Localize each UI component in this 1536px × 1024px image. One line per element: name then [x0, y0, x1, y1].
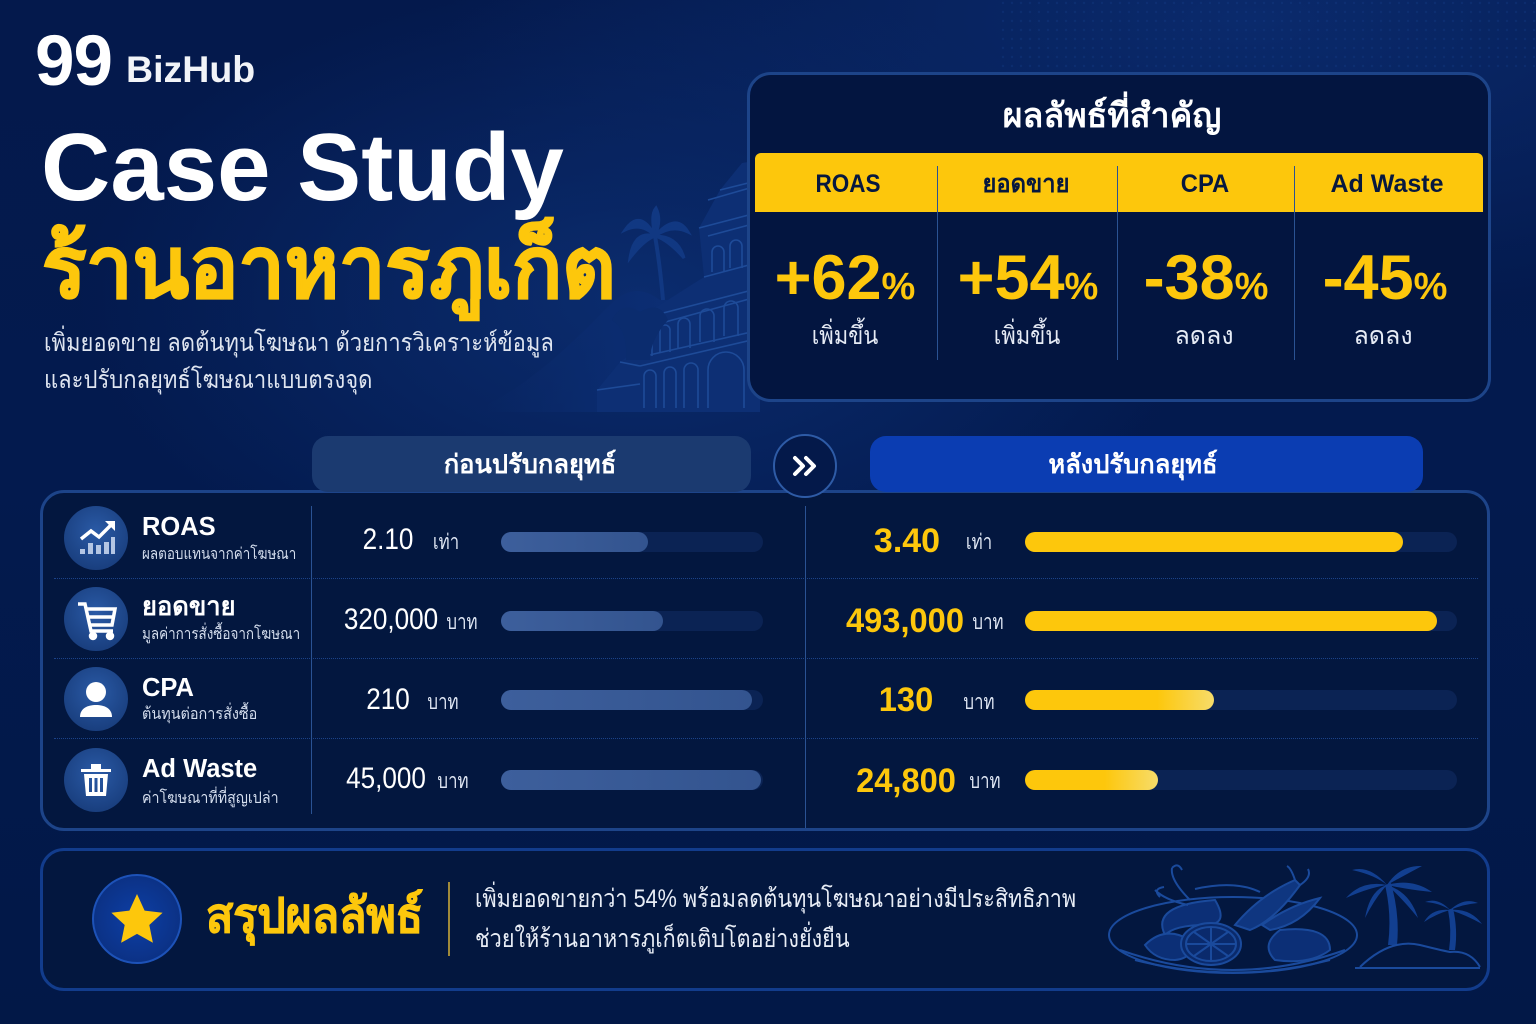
illustration: Phuket heritage building and palm — [578, 162, 760, 412]
illustration: seafood plate and palms — [1108, 864, 1482, 974]
sales after value: 493,000 — [846, 602, 964, 640]
CPA before value: 210 — [366, 683, 410, 716]
sales before bar — [501, 611, 763, 631]
description: และปรับกลยุทธ์โฆษณาแบบตรงจุด — [44, 366, 372, 394]
header Ad Waste: Ad Waste — [1331, 170, 1443, 198]
column divider — [937, 166, 938, 360]
panel: key results — [747, 72, 1491, 402]
ROAS description: ผลตอบแทนจากค่าโฆษณา — [142, 546, 296, 563]
sales after bar — [1025, 611, 1457, 631]
description — [44, 326, 554, 394]
logo mark 99: 99 — [35, 22, 112, 101]
subtitle: ร้านอาหารภูเก็ต — [42, 221, 616, 316]
sales direction: เพิ่มขึ้น — [994, 322, 1060, 350]
CPA result: -38% — [1144, 243, 1268, 313]
icon: person — [64, 667, 128, 731]
after label: หลังปรับกลยุทธ์ — [1048, 449, 1218, 479]
ROAS after bar — [1025, 532, 1457, 552]
logo — [35, 22, 255, 101]
ROAS name: ROAS — [142, 513, 216, 541]
title: Case Study — [41, 114, 564, 221]
dotted texture top right — [1002, 2, 1535, 67]
icon: trash bin — [64, 748, 128, 812]
ROAS before value: 2.10 — [363, 523, 413, 556]
Ad Waste description: ค่าโฆษณาที่ที่สูญเปล่า — [142, 790, 279, 807]
sales name: ยอดขาย — [142, 593, 236, 621]
CPA before bar — [501, 690, 763, 710]
header CPA: CPA — [1181, 170, 1229, 198]
ROAS after value: 3.40 — [874, 522, 940, 560]
Ad Waste before unit: บาท — [437, 770, 469, 793]
summary text: เพิ่มยอดขายกว่า 54% พร้อมลดต้นทุนโฆษณาอย่างมีประสิทธิภาพ — [475, 885, 1076, 913]
sales result: +54% — [958, 243, 1098, 313]
after header tab — [870, 436, 1423, 492]
CPA description: ต้นทุนต่อการสั่งซื้อ — [142, 706, 257, 723]
ROAS before unit: เท่า — [433, 531, 459, 554]
Ad Waste direction: ลดลง — [1353, 322, 1413, 350]
column divider — [1117, 166, 1118, 360]
before label: ก่อนปรับกลยุทธ์ — [444, 449, 616, 479]
summary text — [475, 882, 1076, 954]
panel: summary — [40, 848, 1490, 991]
CPA direction: ลดลง — [1174, 322, 1234, 350]
CPA after unit: บาท — [963, 691, 995, 714]
ROAS direction: เพิ่มขึ้น — [812, 322, 878, 350]
CPA name: CPA — [142, 674, 194, 702]
sales description: มูลค่าการสั่งซื้อจากโฆษณา — [142, 626, 300, 643]
column divider — [1294, 166, 1295, 360]
Ad Waste result: -45% — [1323, 243, 1447, 313]
row: Ad Waste — [64, 748, 1457, 812]
sales before value: 320,000 — [344, 603, 438, 636]
yellow header band — [755, 153, 1483, 212]
Ad Waste name: Ad Waste — [142, 755, 257, 783]
icon: cart — [64, 587, 128, 651]
arrow: before to after — [773, 434, 837, 498]
ROAS after unit: เท่า — [966, 531, 992, 554]
CPA before unit: บาท — [427, 691, 459, 714]
logo wordmark: BizHub — [126, 48, 255, 90]
Ad Waste before value: 45,000 — [346, 762, 426, 795]
Ad Waste after unit: บาท — [969, 770, 1001, 793]
key results heading: ผลลัพธ์ที่สำคัญ — [1003, 97, 1221, 135]
header sales: ยอดขาย — [982, 170, 1070, 198]
CPA after value: 130 — [879, 681, 933, 719]
sales after unit: บาท — [972, 611, 1004, 634]
before header tab — [312, 436, 751, 492]
CPA after bar — [1025, 690, 1457, 710]
row: sales — [64, 587, 1457, 651]
panel: comparison table — [40, 490, 1490, 831]
header ROAS: ROAS — [815, 170, 881, 198]
Ad Waste after value: 24,800 — [856, 762, 956, 800]
icon: star badge — [92, 874, 182, 964]
Ad Waste after bar — [1025, 770, 1457, 790]
ROAS before bar — [501, 532, 763, 552]
Ad Waste before bar — [501, 770, 763, 790]
sales before unit: บาท — [446, 611, 478, 634]
ROAS result: +62% — [775, 243, 915, 313]
summary heading: สรุปผลลัพธ์ — [206, 890, 423, 943]
summary text: ช่วยให้ร้านอาหารภูเก็ตเติบโตอย่างยั่งยืน — [475, 925, 850, 953]
row: CPA — [64, 667, 1457, 731]
row: ROAS — [64, 506, 1457, 570]
icon: growth chart — [64, 506, 128, 570]
description: เพิ่มยอดขาย ลดต้นทุนโฆษณา ด้วยการวิเคราะห์ข้อมูล — [44, 329, 554, 357]
